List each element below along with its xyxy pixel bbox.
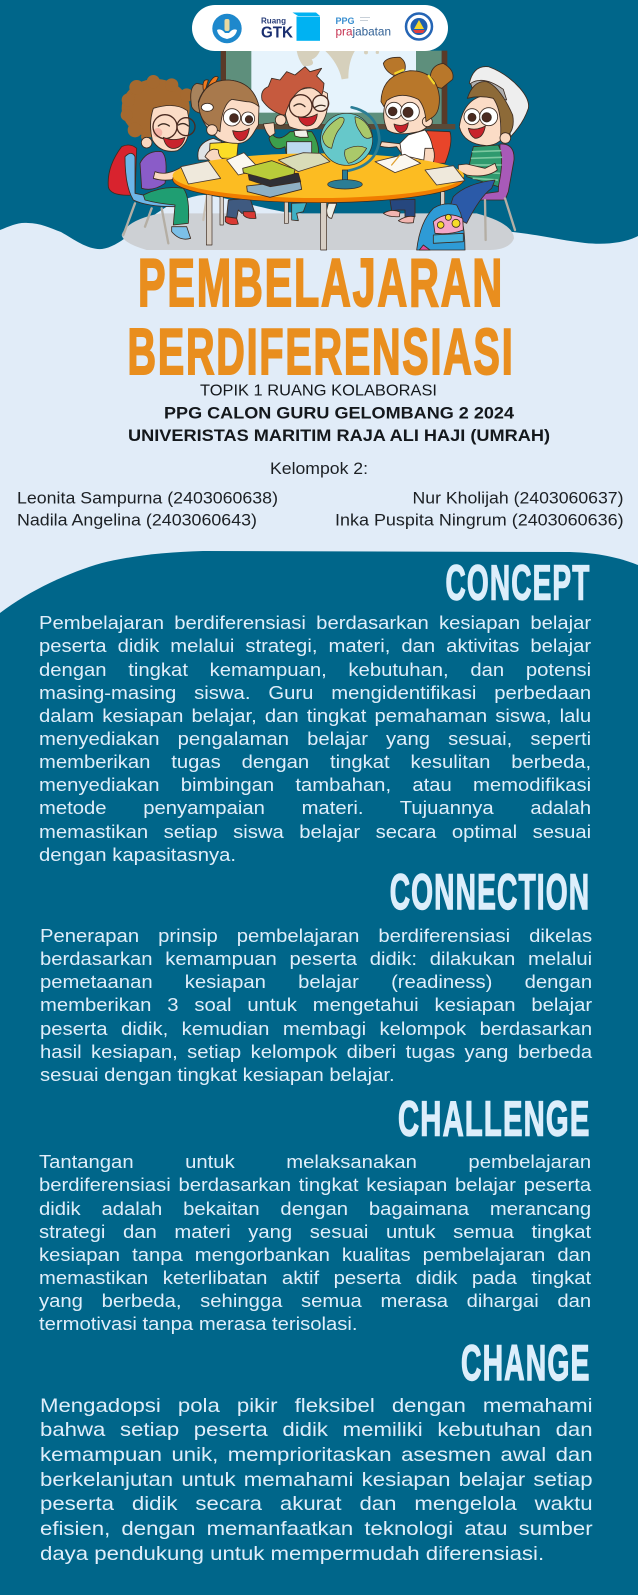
text: change body [40, 1395, 592, 1565]
stack of books [243, 161, 302, 197]
logo: Ruang GTK: Ruang [261, 16, 286, 26]
text: connection body: sesuai dengan tingkat kesiapan belajar. [40, 1065, 394, 1085]
group members [17, 460, 624, 529]
group members: Kelompok 2: [270, 460, 368, 478]
text: challenge body: kesiapan tanpa mengorbankan kualitas pembelajaran dan [38, 1245, 591, 1265]
subtitle block: UNIVERISTAS MARITIM RAJA ALI HAJI (UMRAH) [128, 427, 550, 445]
text: concept body: Pembelajaran berdiferensiasi berdasarkan kesiapan belajar [38, 613, 591, 633]
logo: Ruang GTK: GTK [261, 25, 294, 42]
text: concept body: menyediakan pengalaman belajar yang sesuai, seperti [38, 729, 591, 749]
title [128, 245, 514, 388]
text: change body: berkelanjutan untuk memahami kesiapan belajar setiap [40, 1469, 592, 1491]
text: concept body: dengan tingkat kemampuan, kebutuhan, dan potensi [38, 660, 591, 680]
child 5: white cap, striped shirt [450, 67, 529, 240]
subtitle block: TOPIK 1 RUANG KOLABORASI [200, 382, 437, 399]
text: concept body: menyediakan bimbingan tambahan, atau memodifikasi [38, 775, 591, 795]
text: connection body: hasil kesiapan, setiap kelompok diberi tugas yang berbeda [40, 1042, 592, 1062]
text: connection body: peserta didik, kemudian membagi kelompok berdasarkan [40, 1019, 592, 1039]
text: concept body: metode penyampaian materi. Tujuannya adalah [38, 798, 591, 818]
logo: PPG prajabatan [336, 16, 391, 39]
text: challenge body: strategi dan materi yang sesuai untuk semua tingkat [38, 1222, 591, 1242]
text: connection body [40, 926, 592, 1085]
text: change body: Mengadopsi pola pikir fleksibel dengan memahami [40, 1395, 592, 1417]
text: change body: daya pendukung untuk mempermudah diferensiasi. [40, 1543, 544, 1565]
text: challenge body: didik adalah bekaitan dengan bagaimana merancang [38, 1198, 591, 1218]
text: change body: bahwa setiap peserta didik memiliki kebutuhan dan [40, 1419, 592, 1441]
subtitle block [128, 382, 550, 445]
text: concept body: dengan kapasitasnya. [38, 845, 236, 865]
window with world map [221, 50, 455, 129]
text: concept body [38, 613, 591, 865]
illustration: children studying around a table [108, 50, 529, 250]
group members: Nadila Angelina (2403060643) [17, 511, 257, 529]
text: change body: kemampuan unik, memprioritaskan asesmen awal dan [40, 1444, 592, 1466]
text: connection body: pemetaanan kesiapan belajar (readiness) dengan [40, 972, 592, 992]
text: concept body: dalam kesiapan belajar, dan tingkat pemahaman siswa, lalu [38, 706, 591, 726]
text: concept body: peserta didik melalui strategi, materi, dan aktivitas belajar [38, 636, 591, 656]
globe [321, 107, 379, 189]
text: change body: efisien, dengan memanfaatkan teknologi atau sumber [40, 1518, 592, 1540]
child 3: red hair, green sweater [262, 67, 337, 221]
text: challenge body: Tantangan untuk melaksanakan pembelajaran [38, 1152, 591, 1172]
subtitle block: PPG CALON GURU GELOMBANG 2 2024 [164, 404, 515, 422]
icon: Tut Wuri Handayani logo [212, 14, 242, 43]
group members: Leonita Sampurna (2403060638) [17, 489, 278, 507]
open books and papers on table [181, 153, 465, 185]
front backpack [417, 204, 465, 250]
text: connection body: memberikan 3 soal untuk mengetahui kesiapan belajar [40, 995, 592, 1015]
icon: UMRAH university logo [406, 14, 432, 40]
text: concept body: memastikan setiap siswa belajar secara optimal sesuai [38, 822, 591, 842]
text: concept body: masing-masing siswa. Guru mengidentifikasi perbedaan [38, 683, 591, 703]
text: connection body: berdasarkan kemampuan peserta didik: dilakukan melalui [40, 949, 592, 969]
logo: PPG prajabatan: prajabatan [336, 25, 391, 39]
child 1: curly hair, purple shirt [108, 75, 195, 243]
text: challenge body: yang berbeda, sehingga semua merasa dihargai dan [38, 1291, 591, 1311]
group members: Nur Kholijah (2403060637) [412, 489, 624, 507]
logo: Ruang GTK [261, 12, 320, 42]
text: connection body: Penerapan prinsip pembelajaran berdiferensiasi dikelas [40, 926, 592, 946]
text: concept body: memberikan tugas dengan tingkat kesulitan berbeda, [38, 752, 591, 772]
floor shadow [122, 213, 514, 250]
table [173, 153, 464, 250]
text: challenge body: memastikan keterlibatan aktif peserta didik pada tingkat [38, 1268, 591, 1288]
child 4: pigtails, white shirt [380, 57, 453, 223]
group members: Inka Puspita Ningrum (2403060636) [335, 511, 624, 529]
logo bar [192, 5, 448, 51]
logo: PPG prajabatan: PPG [336, 16, 354, 27]
text: challenge body: termotivasi tanpa merasa terisolasi. [38, 1314, 357, 1334]
text: challenge body: berdiferensiasi berdasarkan tingkat kesiapan belajar peserta [38, 1175, 591, 1195]
text: challenge body [38, 1152, 592, 1334]
child 2: ponytail and orange bow, yellow shirt [191, 76, 259, 225]
